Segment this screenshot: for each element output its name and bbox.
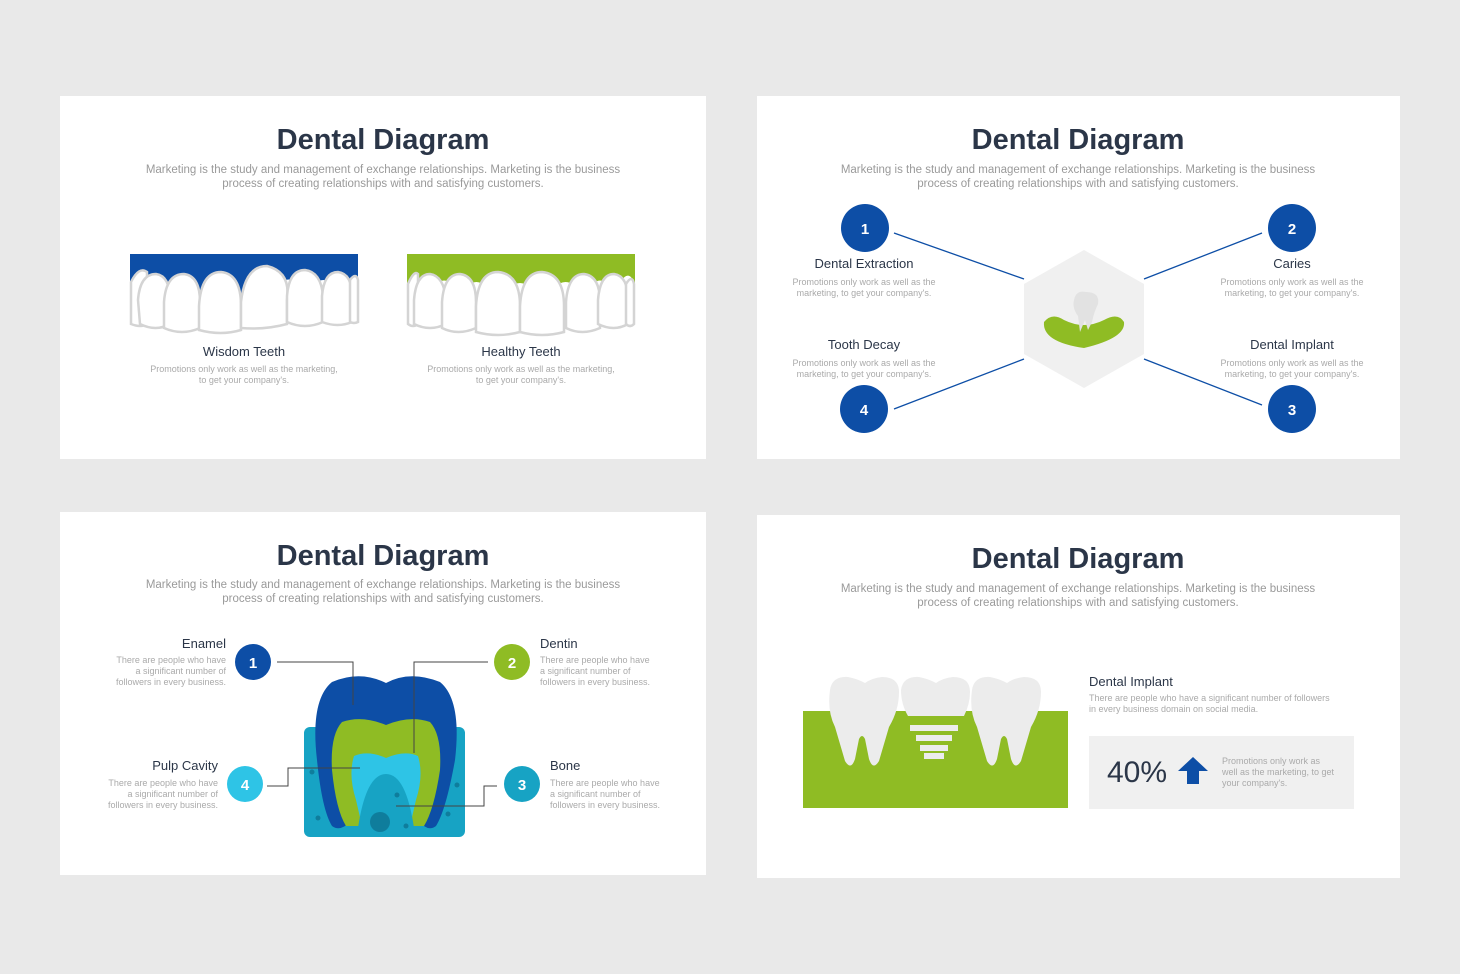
marker 4 pulp (227, 766, 263, 802)
text: dentin (540, 636, 650, 687)
label: wisdom teeth: Promotions only work as well as the marketing, (150, 364, 338, 374)
text: bone: Bone (550, 758, 580, 773)
text: pulp cavity: followers in every business. (108, 800, 218, 810)
subtitle: Marketing is the study and management of exchange relationships. Marketing is the business (146, 164, 620, 176)
text: pulp cavity: a significant number of (127, 789, 218, 799)
label: wisdom teeth: Wisdom Teeth (203, 344, 285, 359)
icon: up arrow (1178, 757, 1208, 784)
label: healthy teeth (427, 344, 615, 385)
text: dentin: Dentin (540, 636, 578, 651)
title: Dental Diagram (972, 543, 1184, 575)
text: bone: There are people who have (550, 778, 660, 788)
marker 1 (841, 204, 889, 252)
subtitle: Marketing is the study and management of exchange relationships. Marketing is the business (841, 164, 1315, 176)
illustration: wisdom teeth (130, 254, 358, 333)
tooth cross-section (304, 676, 465, 837)
subtitle: process of creating relationships with and satisfying customers. (917, 597, 1239, 609)
marker 2: 2 (1288, 221, 1296, 238)
text: bone: a significant number of (550, 789, 641, 799)
subtitle (841, 583, 1315, 609)
label: wisdom teeth: to get your company's. (199, 375, 289, 385)
text: dental extraction: Promotions only work as well as the (792, 277, 936, 287)
text: dental implant: Dental Implant (1250, 337, 1334, 352)
text: pulp cavity: Pulp Cavity (152, 758, 218, 773)
marker 1 enamel: 1 (249, 655, 257, 672)
label: healthy teeth: Healthy Teeth (481, 344, 561, 359)
text: tooth decay: Promotions only work as well as the (792, 358, 936, 368)
text: dental implant: Dental Implant (1089, 674, 1173, 689)
text: dental extraction (792, 256, 936, 298)
subtitle (841, 164, 1315, 190)
text: caries: marketing, to get your company's. (1225, 288, 1359, 298)
text: caries (1220, 256, 1364, 298)
subtitle: process of creating relationships with and satisfying customers. (222, 178, 544, 190)
title: Dental Diagram (972, 124, 1184, 156)
label: healthy teeth: Promotions only work as well as the marketing, (427, 364, 615, 374)
marker 4: 4 (860, 402, 869, 419)
text: enamel: There are people who have (116, 655, 226, 665)
label: healthy teeth: to get your company's. (476, 375, 566, 385)
text: dental implant (1089, 674, 1330, 714)
text: bone (550, 758, 660, 810)
text: enamel: a significant number of (135, 666, 226, 676)
marker 2 (1268, 204, 1316, 252)
text: enamel (116, 636, 226, 687)
subtitle (146, 164, 620, 190)
stat box: Promotions only work as (1222, 756, 1321, 766)
text: dental implant: Promotions only work as well as the (1220, 358, 1364, 368)
text: dentin: There are people who have (540, 655, 650, 665)
connector lines (894, 233, 1262, 409)
text: pulp cavity: There are people who have (108, 778, 218, 788)
marker 1: 1 (861, 221, 869, 238)
marker 3 bone: 3 (518, 777, 526, 794)
text: dental implant (1220, 337, 1364, 379)
marker 3 (1268, 385, 1316, 433)
panel: tooth anatomy (60, 512, 706, 875)
stat box (1089, 736, 1354, 809)
text: pulp cavity (108, 758, 218, 810)
text: dental implant: in every business domain on social media. (1089, 704, 1258, 714)
marker 3 bone (504, 766, 540, 802)
stat box: 40% (1107, 756, 1167, 789)
subtitle: process of creating relationships with and satisfying customers. (222, 593, 544, 605)
title: Dental Diagram (277, 540, 489, 572)
subtitle: Marketing is the study and management of exchange relationships. Marketing is the business (841, 583, 1315, 595)
panel: teeth comparison (60, 96, 706, 459)
text: dental extraction: marketing, to get your company's. (797, 288, 931, 298)
panel: dental problems (757, 96, 1400, 459)
leader lines (267, 662, 497, 806)
text: dental implant: marketing, to get your company's. (1225, 369, 1359, 379)
label: wisdom teeth (150, 344, 338, 385)
text: dentin: a significant number of (540, 666, 631, 676)
text: tooth decay: Tooth Decay (828, 337, 901, 352)
subtitle: process of creating relationships with and satisfying customers. (917, 178, 1239, 190)
implant illustration (803, 677, 1068, 808)
panel: dental implant (757, 515, 1400, 878)
marker 4 pulp: 4 (241, 777, 250, 794)
illustration: healthy teeth (407, 254, 635, 335)
text: tooth decay (792, 337, 936, 379)
stat box: well as the marketing, to get (1221, 767, 1335, 777)
text: tooth decay: marketing, to get your company's. (797, 369, 931, 379)
marker 3: 3 (1288, 402, 1296, 419)
stat box: your company's. (1222, 778, 1287, 788)
marker 1 enamel (235, 644, 271, 680)
marker 2 dentin: 2 (508, 655, 516, 672)
hexagon icon (1024, 250, 1144, 388)
text: dentin: followers in every business. (540, 677, 650, 687)
subtitle (146, 579, 620, 605)
text: caries: Caries (1273, 256, 1311, 271)
subtitle: Marketing is the study and management of exchange relationships. Marketing is the business (146, 579, 620, 591)
text: caries: Promotions only work as well as the (1220, 277, 1364, 287)
text: dental extraction: Dental Extraction (814, 256, 914, 271)
text: dental implant: There are people who have a significant number of followers (1089, 693, 1330, 703)
text: enamel: followers in every business. (116, 677, 226, 687)
marker 2 dentin (494, 644, 530, 680)
text: enamel: Enamel (182, 636, 226, 651)
text: bone: followers in every business. (550, 800, 660, 810)
title: Dental Diagram (277, 124, 489, 156)
marker 4 (840, 385, 888, 433)
